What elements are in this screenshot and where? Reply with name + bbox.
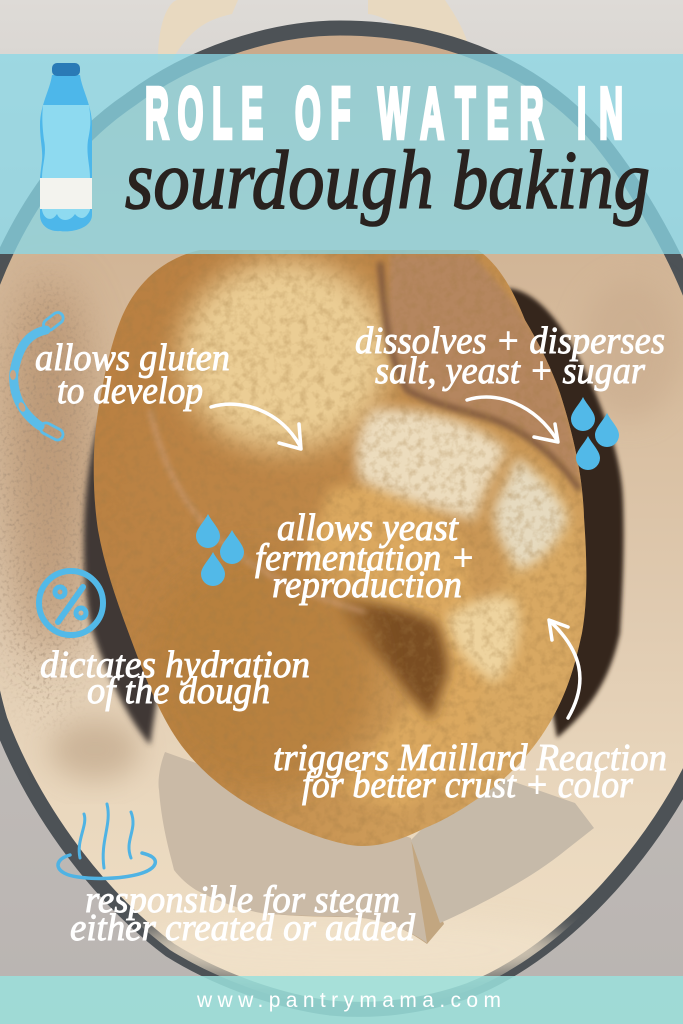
label: gluten xyxy=(35,337,230,412)
burnt shadow right of loaf xyxy=(507,288,624,738)
lower crust xyxy=(145,550,375,790)
pale top of loaf xyxy=(180,260,390,450)
arrow: Maillard xyxy=(549,620,580,718)
loaf xyxy=(94,250,586,846)
label: Maillard: triggers Maillard Reaction xyxy=(273,737,667,779)
label: dissolves xyxy=(355,320,665,392)
golden crust centre xyxy=(303,482,478,807)
footer url: www.pantrymama.com xyxy=(196,989,501,1012)
crust base xyxy=(94,250,586,846)
dark crust streak xyxy=(338,600,448,720)
parchment left flap xyxy=(159,752,427,943)
label: gluten: allows gluten xyxy=(35,337,230,379)
right crumb xyxy=(494,457,567,570)
score line xyxy=(150,410,365,612)
label: Maillard: for better crust + color xyxy=(302,764,633,806)
label: steam: responsible for steam xyxy=(85,879,400,921)
label: steam xyxy=(70,879,416,949)
icon: drops centre xyxy=(196,514,244,586)
header band xyxy=(0,54,683,254)
parchment right flap xyxy=(411,770,594,923)
icon: water bottle xyxy=(40,63,92,231)
label: Maillard xyxy=(273,737,667,806)
title: WATER xyxy=(378,72,555,153)
label: hydration xyxy=(40,644,310,712)
pot handles xyxy=(158,0,472,60)
title: ROLE xyxy=(145,72,272,153)
label: fermentation: allows yeast xyxy=(277,507,459,549)
label: gluten: to develop xyxy=(57,370,203,412)
pot speckle texture xyxy=(0,284,96,722)
arrow: gluten xyxy=(211,404,301,449)
title: OF xyxy=(295,72,360,153)
label: hydration: dictates hydration xyxy=(40,644,310,686)
icon: drops right xyxy=(571,397,619,470)
label: steam: either created or added xyxy=(70,907,416,949)
label: dissolves: dissolves + disperses xyxy=(355,320,665,362)
lower crumb xyxy=(447,596,519,683)
pot inner shading xyxy=(0,260,680,980)
crust texture xyxy=(103,254,586,846)
footer band xyxy=(0,976,683,1024)
shadow left of loaf xyxy=(84,420,160,745)
parchment paper xyxy=(159,752,594,944)
ear xyxy=(387,255,581,485)
label: fermentation xyxy=(255,507,475,606)
icon: percent xyxy=(39,571,103,635)
label: fermentation: fermentation + xyxy=(255,537,475,579)
parchment underside xyxy=(261,840,444,944)
label: hydration: of the dough xyxy=(87,670,270,712)
label: dissolves: salt, yeast + sugar xyxy=(375,350,645,392)
icon: steam xyxy=(58,804,155,878)
ear dark edge xyxy=(380,262,580,490)
arrow: dissolves xyxy=(467,397,558,442)
golden rim right xyxy=(484,534,584,763)
pale centre crumb xyxy=(356,409,507,520)
label: fermentation: reproduction xyxy=(272,564,462,606)
title: IN xyxy=(577,72,636,153)
title xyxy=(145,72,636,153)
icon: chain xyxy=(10,310,65,442)
